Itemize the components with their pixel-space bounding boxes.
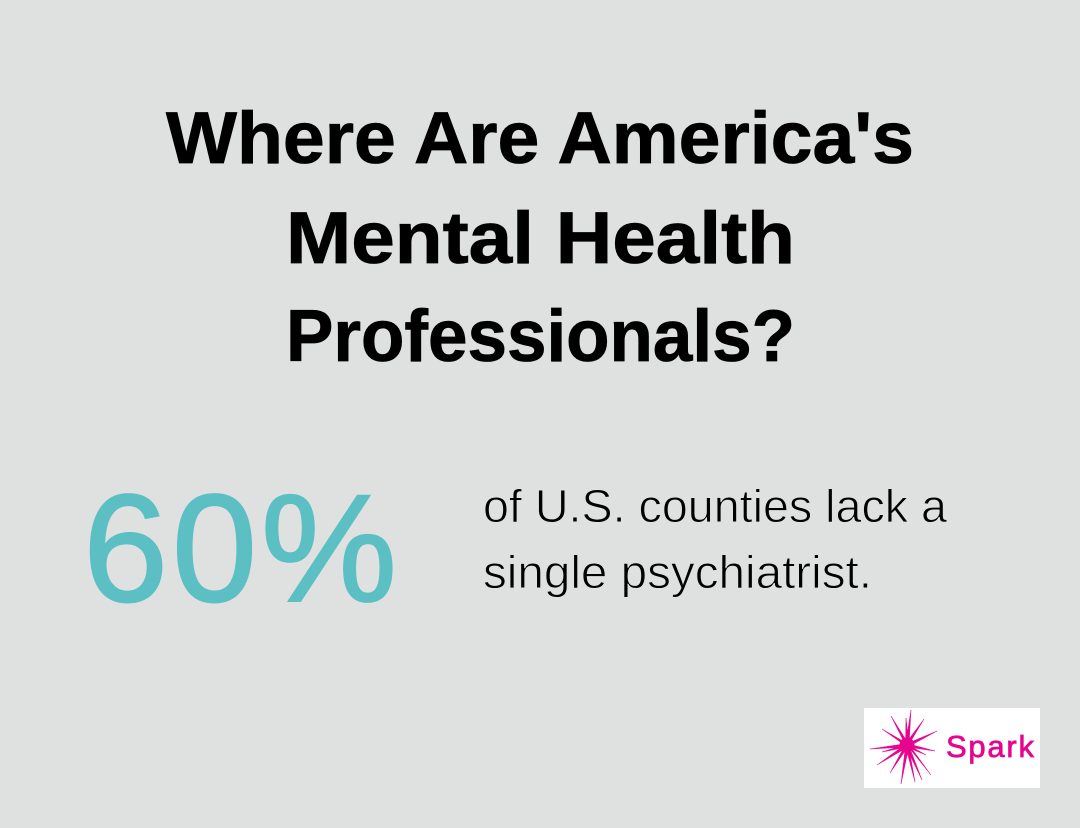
description text bbox=[483, 480, 947, 598]
title: Professionals? bbox=[286, 296, 795, 377]
description text: of U.S. counties lack a bbox=[483, 480, 947, 532]
icon: starburst bbox=[870, 710, 937, 784]
description text: single psychiatrist. bbox=[483, 546, 872, 598]
logo: Spark bbox=[864, 708, 1040, 788]
title: Where Are America's bbox=[166, 98, 914, 179]
title: Mental Health bbox=[286, 198, 795, 279]
wordmark: Spark bbox=[946, 729, 1034, 764]
statistic: 60%: 60% bbox=[83, 463, 397, 634]
title bbox=[166, 98, 914, 377]
